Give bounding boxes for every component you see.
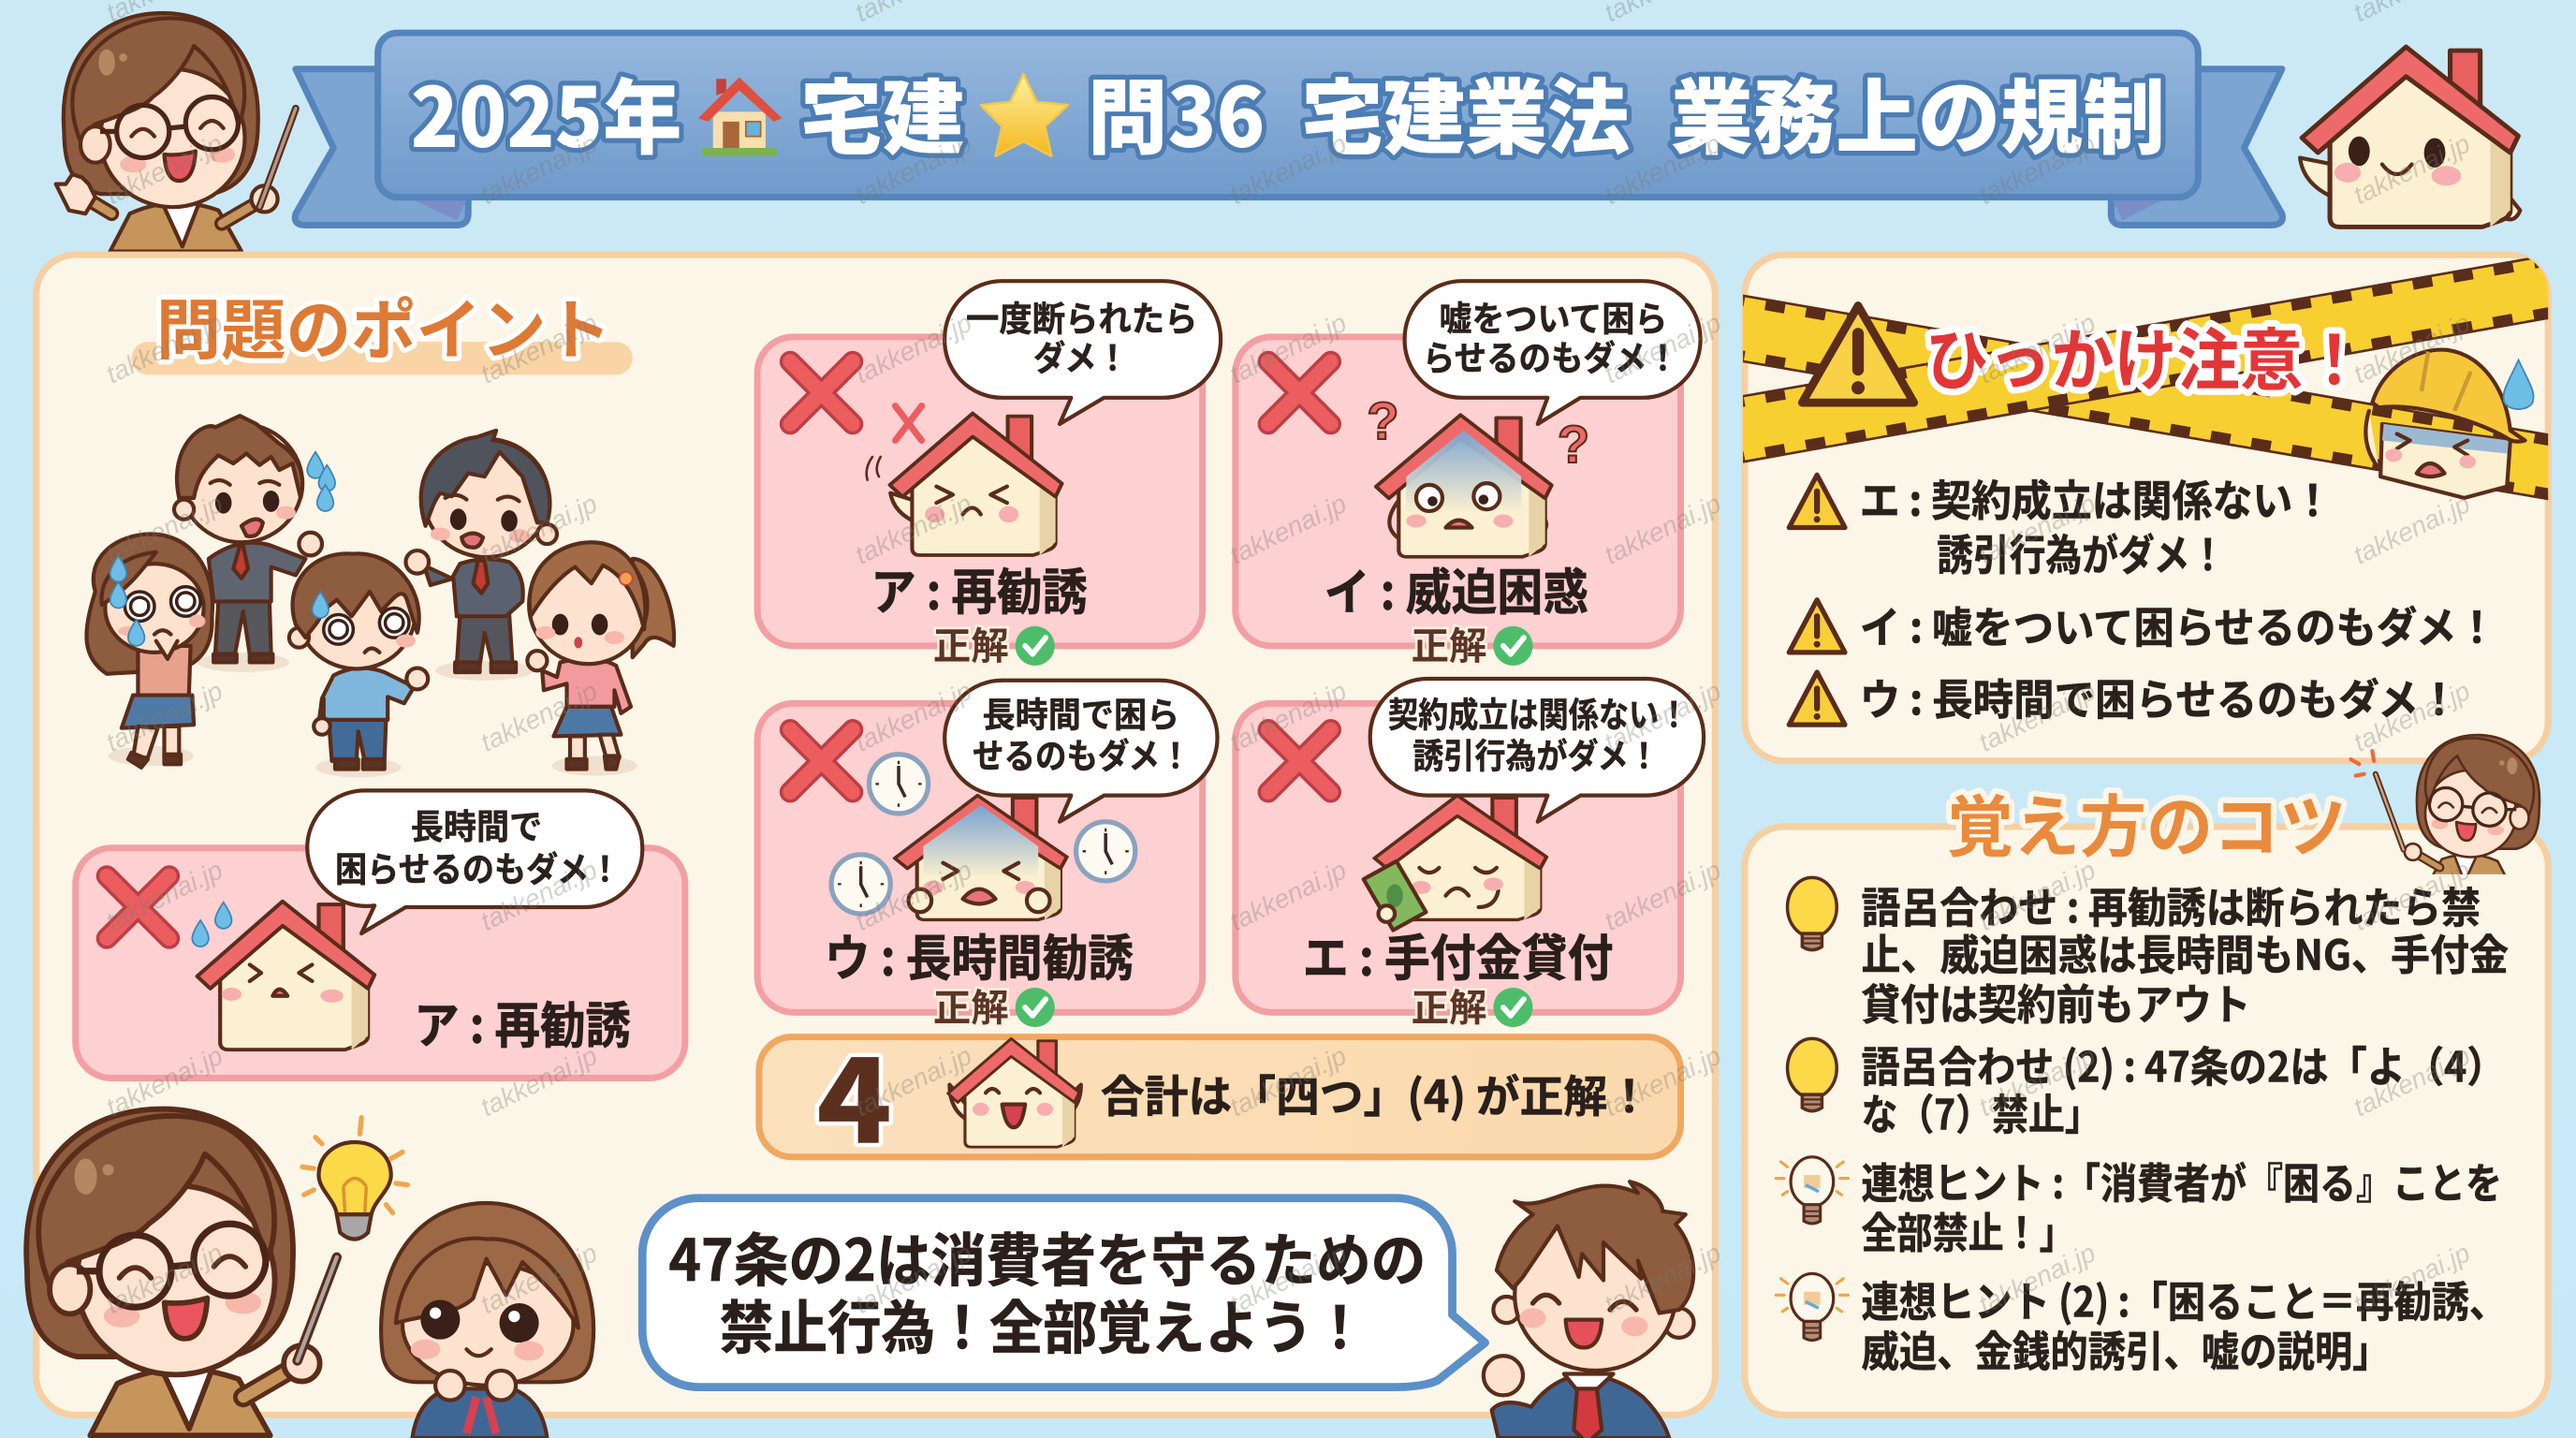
speech bubble: ダメ！ — [1033, 330, 1129, 381]
icon: cross — [790, 729, 853, 792]
watermark: takkenai.jp — [2349, 308, 2475, 389]
icon: cross — [790, 361, 853, 424]
watermark: takkenai.jp — [851, 676, 976, 757]
tip 2 — [1788, 1034, 2506, 1142]
watermark: takkenai.jp — [1600, 1238, 1725, 1319]
man in gray suit left — [174, 416, 335, 662]
watermark: takkenai.jp — [1600, 855, 1725, 936]
tip 2: 語呂合わせ (2) : 47条の2は「よ（4） — [1862, 1034, 2506, 1094]
warning mark — [1852, 333, 1865, 394]
label: イ : 威迫困惑 — [1325, 553, 1588, 624]
icon: warning — [1802, 306, 1914, 403]
correct mark: 正解 — [933, 976, 1009, 1032]
callout: 47条の2は消費者を守るための — [668, 1214, 1426, 1298]
watermark: takkenai.jp — [476, 489, 602, 570]
item: エ: エ : 契約成立は関係ない！ — [1860, 467, 2333, 529]
speech bubble: 長時間で — [411, 799, 542, 849]
watermark: takkenai.jp — [1974, 1041, 2100, 1122]
speech bubble — [1370, 679, 1704, 822]
watermark: takkenai.jp — [2349, 128, 2475, 210]
watermark: takkenai.jp — [476, 1238, 602, 1319]
correct mark: 正解 — [933, 615, 1009, 670]
watermark: takkenai.jp — [851, 308, 976, 389]
correct mark: 正解 — [1412, 615, 1486, 670]
watermark: takkenai.jp — [1225, 676, 1351, 757]
watermark: takkenai.jp — [1225, 1238, 1351, 1319]
watermark: takkenai.jp — [101, 676, 227, 757]
tip 1: 貸付は契約前もアウト — [1862, 971, 2250, 1032]
house with helmet — [2365, 350, 2534, 498]
tip 2: な（7）禁止」 — [1862, 1081, 2101, 1142]
girl student — [381, 1203, 593, 1438]
title text: 業務上の規制 — [1671, 52, 2165, 171]
watermark: takkenai.jp — [476, 676, 602, 757]
title text: 2025年 — [411, 52, 681, 171]
title ribbon — [295, 33, 2282, 225]
house tired with clocks — [831, 755, 1135, 919]
watermark: takkenai.jp — [1600, 308, 1725, 389]
watermark: takkenai.jp — [1600, 489, 1725, 570]
watermark: takkenai.jp — [1225, 128, 1351, 210]
tip 4: 威迫、金銭的誘引、嘘の説明」 — [1862, 1317, 2391, 1378]
icon: house — [698, 78, 782, 156]
watermark: takkenai.jp — [476, 1041, 602, 1122]
item: エ — [1789, 467, 2333, 583]
title text: 宅建業法 — [1301, 52, 1630, 171]
watermark: takkenai.jp — [851, 1041, 976, 1122]
man in dark suit right — [406, 431, 557, 672]
girl with ponytail — [527, 542, 674, 770]
watermark: takkenai.jp — [1225, 855, 1351, 936]
watermark: takkenai.jp — [476, 308, 602, 389]
tip 3: 全部禁止！」 — [1862, 1199, 2075, 1260]
icon: cross — [107, 876, 169, 938]
boy student in suit — [1484, 1181, 1694, 1438]
speech bubble — [1405, 281, 1701, 424]
correct mark: 正解 — [1412, 976, 1486, 1032]
tip 1: 語呂合わせ : 再勧誘は断られたら禁 — [1862, 873, 2481, 934]
tip 1 — [1788, 873, 2509, 1032]
speech bubble: 嘘をついて困ら — [1439, 290, 1667, 341]
speech bubble: 困らせるのもダメ！ — [335, 841, 621, 891]
icon: star — [981, 74, 1068, 156]
house confused: ? — [1558, 415, 1589, 474]
label: エ : 手付金貸付 — [1303, 919, 1614, 990]
house happy — [948, 1038, 1081, 1147]
watermark: takkenai.jp — [476, 855, 602, 936]
callout: 禁止行為！全部覚えよう！ — [720, 1282, 1367, 1365]
correct mark — [1412, 615, 1533, 670]
house with money — [1364, 796, 1546, 931]
small teacher — [2351, 735, 2539, 885]
house mascot top right — [2300, 47, 2520, 227]
watermark: takkenai.jp — [2349, 489, 2475, 570]
item: ウ: ウ : 長時間で困らせるのもダメ！ — [1860, 667, 2459, 728]
watermark: takkenai.jp — [101, 1041, 227, 1122]
total bar — [759, 1010, 1680, 1177]
speech bubble: 一度断られたら — [966, 290, 1197, 341]
icon: light bulb — [302, 1118, 407, 1240]
house sad — [192, 902, 374, 1049]
house refusing — [867, 406, 1061, 555]
tip 3: 連想ヒント :「消費者が『困る』ことを — [1862, 1150, 2502, 1211]
watermark: takkenai.jp — [1974, 1238, 2100, 1319]
watermark: takkenai.jp — [1974, 676, 2100, 757]
icon: cross — [1268, 729, 1331, 792]
watermark: takkenai.jp — [851, 1238, 976, 1319]
watermark: takkenai.jp — [2349, 855, 2475, 936]
heading: problem points: 問題のポイント — [156, 278, 611, 373]
watermark: takkenai.jp — [1225, 489, 1351, 570]
speech bubble: 契約成立は関係ない！ — [1388, 686, 1689, 737]
big teacher — [26, 1109, 337, 1435]
caution tape — [1725, 252, 2571, 503]
title text — [411, 52, 2165, 171]
card: エ — [1236, 679, 1704, 1032]
speech bubble: せるのもダメ！ — [973, 727, 1191, 778]
watermark: takkenai.jp — [101, 489, 227, 570]
correct mark — [1412, 976, 1533, 1032]
watermark: takkenai.jp — [101, 855, 227, 936]
watermark: takkenai.jp — [851, 128, 976, 210]
watermark: takkenai.jp — [101, 128, 227, 210]
watermark: takkenai.jp — [2349, 676, 2475, 757]
item: エ: 誘引行為がダメ！ — [1937, 521, 2226, 583]
teacher top left — [56, 13, 296, 252]
total text: 合計は「四つ」(4) が正解！ — [1101, 1061, 1651, 1125]
label: ア : 再勧誘 — [871, 553, 1088, 624]
panel: memory tips — [1745, 735, 2548, 1415]
panel: trap warning — [1725, 252, 2571, 761]
watermark: takkenai.jp — [1974, 855, 2100, 936]
card: ア — [757, 281, 1221, 670]
label: ウ : 長時間勧誘 — [825, 919, 1134, 990]
watermark: takkenai.jp — [1974, 128, 2100, 210]
illustration: worried people — [86, 416, 674, 777]
speech bubble — [944, 281, 1221, 424]
tip 1: 止、威迫困惑は長時間もNG、手付金 — [1862, 921, 2509, 982]
watermark: takkenai.jp — [1600, 1041, 1725, 1122]
correct mark — [933, 976, 1055, 1032]
watermark: takkenai.jp — [851, 489, 976, 570]
number 4: 4 — [816, 1010, 892, 1177]
watermark: takkenai.jp — [851, 855, 976, 936]
heading: trap warning: ひっかけ注意！ — [1925, 307, 2365, 404]
speech bubble — [307, 790, 642, 933]
watermark: takkenai.jp — [2349, 1041, 2475, 1122]
tip 4 — [1776, 1269, 2507, 1378]
panel: problem points — [26, 255, 1715, 1438]
card: イ — [1236, 281, 1701, 670]
label: ア : 再勧誘 — [414, 987, 631, 1058]
woman crying — [86, 535, 212, 768]
watermark: takkenai.jp — [1225, 308, 1351, 389]
watermark: takkenai.jp — [476, 128, 602, 210]
card: lower left example — [76, 790, 685, 1078]
watermark: takkenai.jp — [2349, 1238, 2475, 1319]
title text: 問36 — [1088, 52, 1265, 171]
watermark: takkenai.jp — [101, 1238, 227, 1319]
title text: 宅建 — [800, 52, 964, 171]
callout — [642, 1198, 1486, 1387]
tip 4: 連想ヒント (2) :「困ること＝再勧誘、 — [1862, 1269, 2507, 1329]
watermark: takkenai.jp — [1225, 1041, 1351, 1122]
speech bubble — [944, 681, 1218, 822]
heading: memory tips: 覚え方のコツ — [1947, 773, 2346, 871]
watermark: takkenai.jp — [1974, 489, 2100, 570]
speech bubble: らせるのもダメ！ — [1423, 330, 1679, 381]
house confused — [1367, 391, 1589, 557]
boy in blue — [289, 553, 428, 770]
speech bubble: 誘引行為がダメ！ — [1412, 727, 1660, 778]
tip 3 — [1776, 1150, 2502, 1260]
watermark: takkenai.jp — [1600, 128, 1725, 210]
watermark: takkenai.jp — [101, 308, 227, 389]
watermark: takkenai.jp — [1600, 676, 1725, 757]
correct mark — [933, 615, 1055, 670]
card: ウ — [757, 681, 1218, 1032]
icon: cross — [1268, 361, 1331, 424]
speech bubble: 長時間で困ら — [983, 686, 1179, 737]
house confused: ? — [1367, 391, 1399, 450]
item: イ: イ : 嘘をついて困らせるのもダメ！ — [1860, 594, 2497, 655]
watermark: takkenai.jp — [1974, 308, 2100, 389]
